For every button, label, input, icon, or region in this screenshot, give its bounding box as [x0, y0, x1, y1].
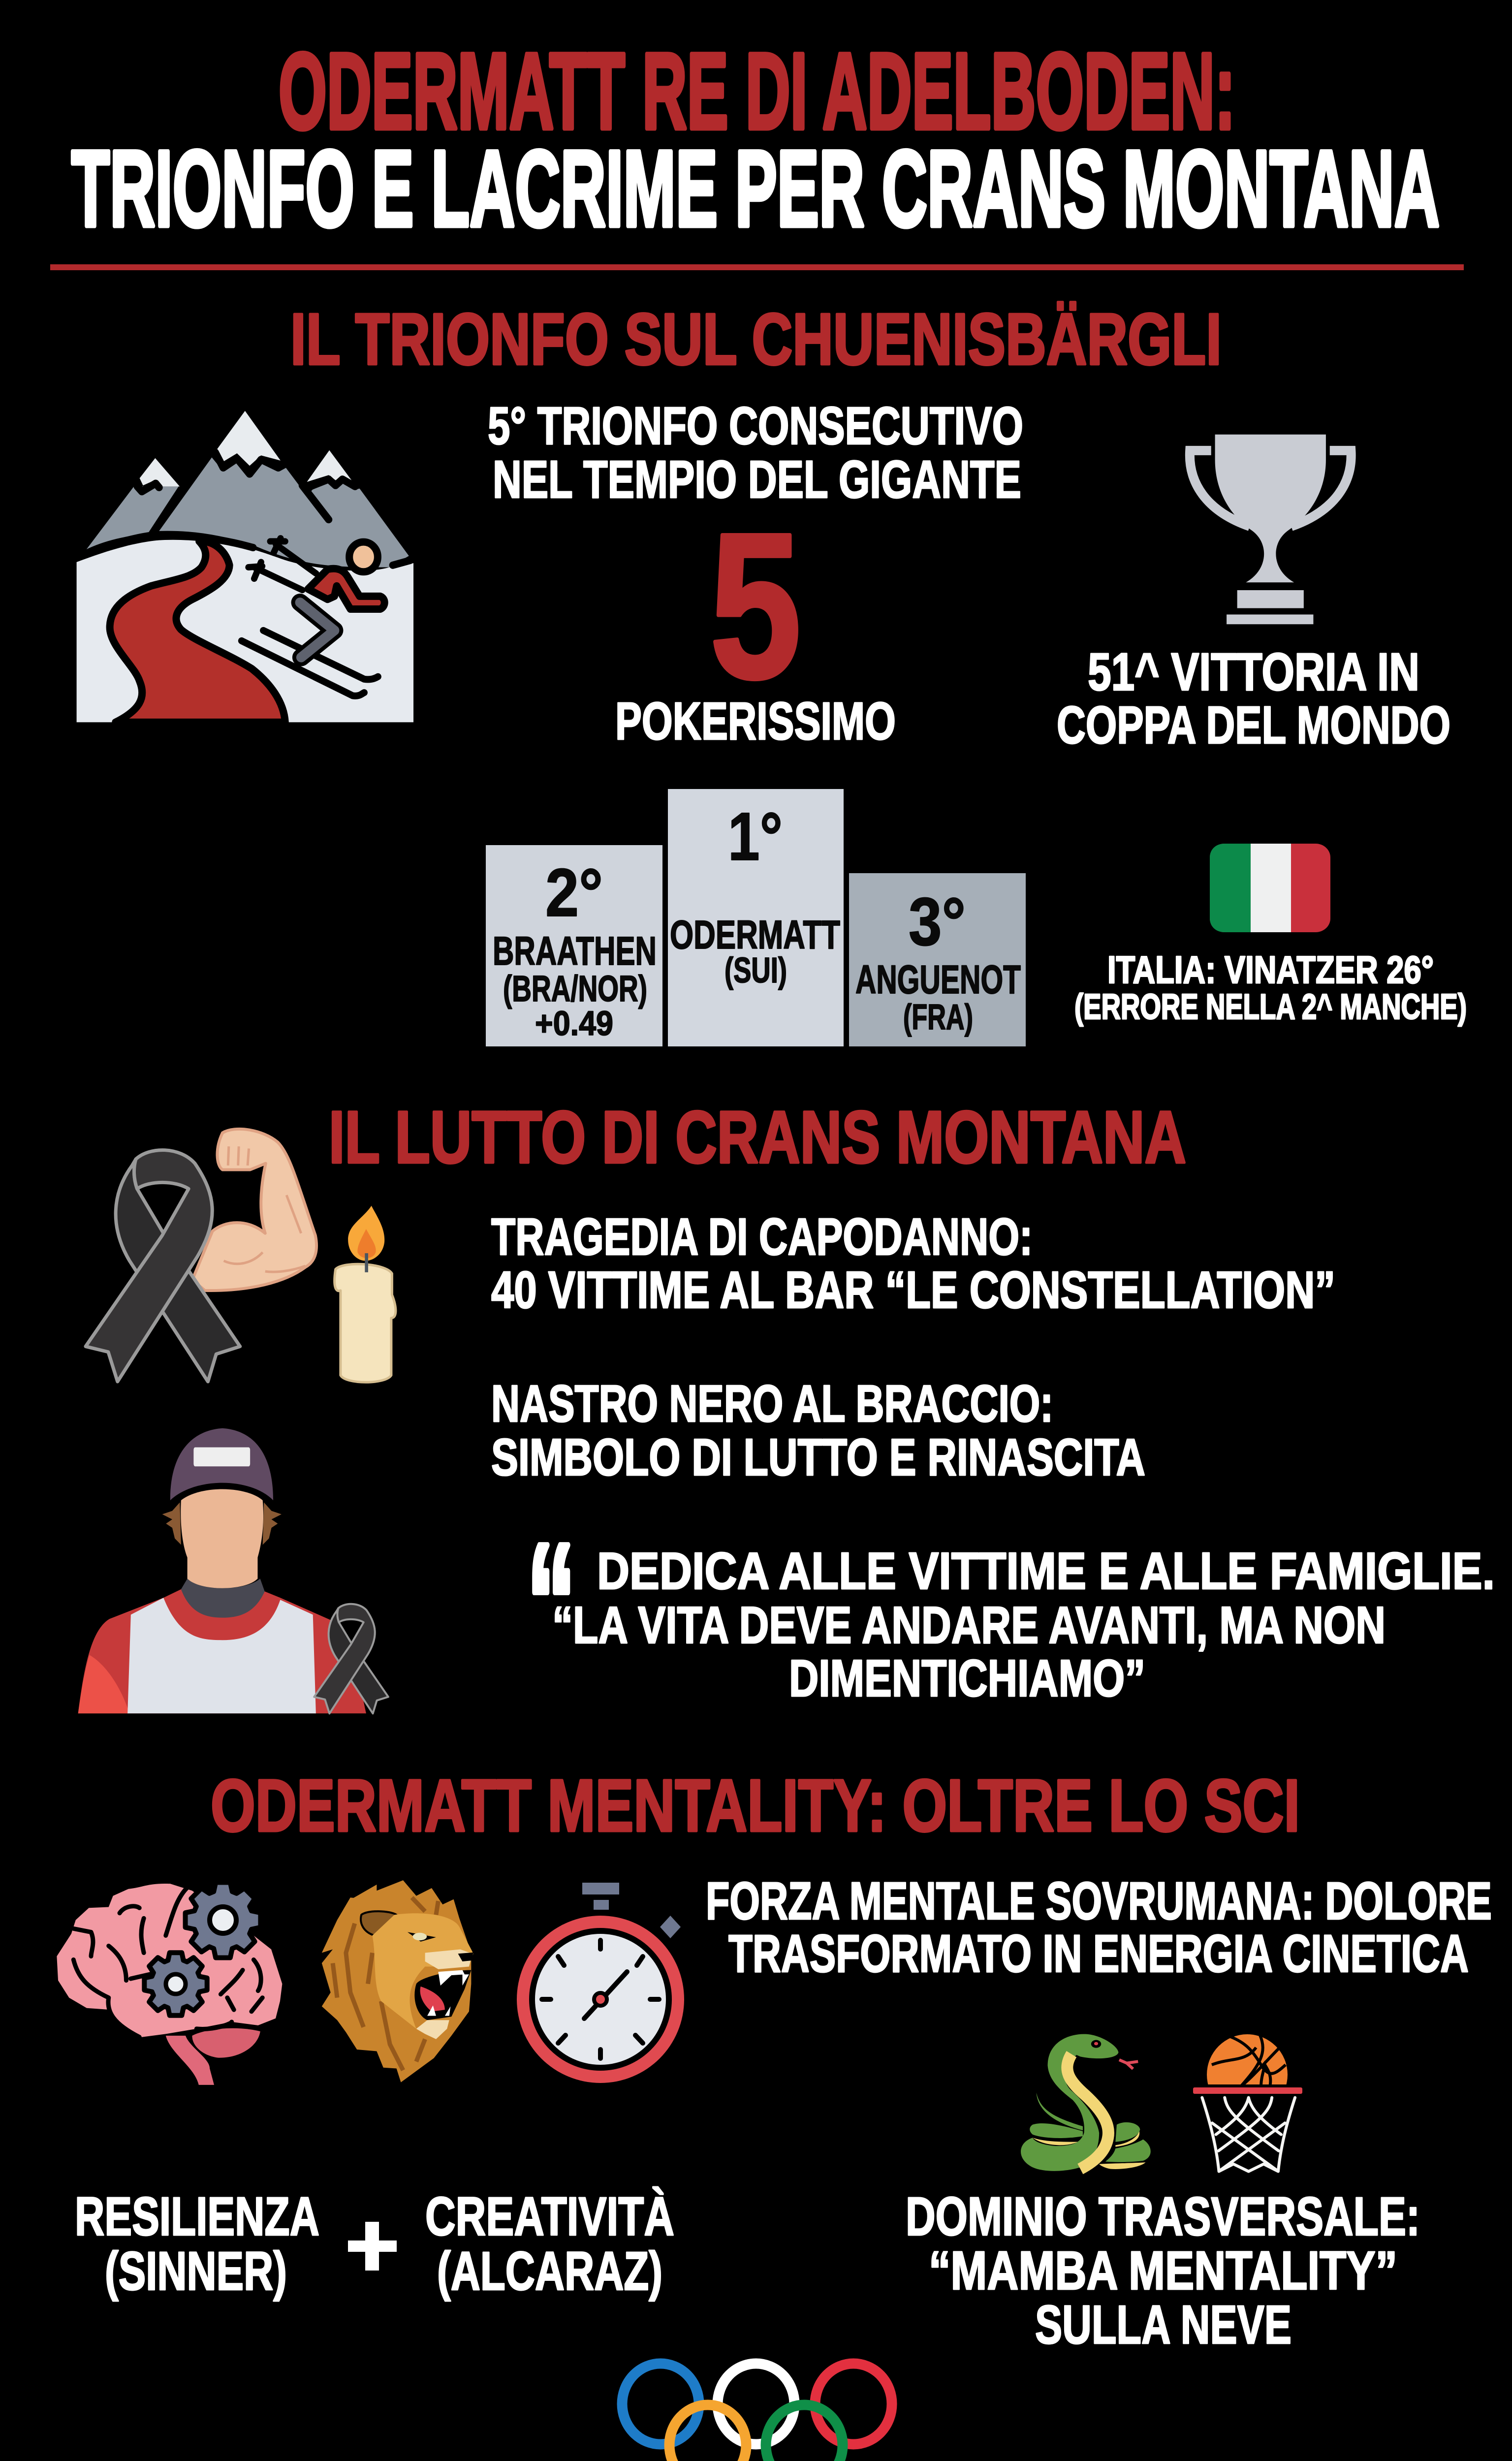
- text: tragedy: TRAGEDIA DI CAPODANNO:: [491, 1208, 1033, 1266]
- podium: third place: ANGUENOT: [855, 957, 1021, 1002]
- stat: fifth consecutive win: POKERISSIMO: [615, 691, 896, 751]
- text: black ribbon: [491, 1375, 1145, 1486]
- podium: first place: 1°: [728, 799, 783, 875]
- quote: “: [527, 1509, 576, 1696]
- icon: black ribbon: [86, 1150, 240, 1382]
- icon: basketball hoop: [1193, 2034, 1302, 2172]
- quote: [527, 1509, 1495, 1707]
- icon: plus: [348, 2222, 397, 2271]
- icon: flexed arm: [192, 1129, 316, 1291]
- stat: 51st victory: 51^ VITTORIA IN: [1088, 642, 1419, 701]
- podium: second place: (BRA/NOR): [503, 968, 647, 1009]
- text: black ribbon: NASTRO NERO AL BRACCIO:: [491, 1375, 1053, 1433]
- icon: lion: [322, 1880, 473, 2082]
- podium: third place: 3°: [909, 884, 966, 960]
- text: creativity: (ALCARAZ): [437, 2241, 662, 2302]
- section heading: il lutto: IL LUTTO DI CRANS MONTANA: [329, 1096, 1186, 1178]
- icon: italian flag: [1210, 844, 1330, 932]
- text: black ribbon: SIMBOLO DI LUTTO E RINASCITA: [491, 1428, 1145, 1486]
- text: mental strength: [706, 1871, 1492, 1983]
- icon: olympic rings: [622, 2364, 892, 2461]
- stat: fifth consecutive win: 5° TRIONFO CONSECUTIVO: [488, 396, 1023, 455]
- stat: fifth consecutive win: [488, 396, 1023, 751]
- stat: fifth consecutive win: 5: [710, 491, 801, 722]
- podium: third place: (FRA): [903, 998, 973, 1037]
- text: resilience: (SINNER): [105, 2241, 287, 2302]
- icon: stopwatch: [517, 1883, 684, 2083]
- podium: third place: [849, 873, 1026, 1046]
- icon: skier on mountain: [77, 411, 413, 722]
- podium: second place: BRAATHEN: [493, 929, 657, 974]
- podium: second place: [486, 845, 662, 1046]
- text: tragedy: [491, 1208, 1335, 1319]
- icon: brain with gears: [57, 1883, 282, 2085]
- italy note: [1074, 948, 1467, 1027]
- stat: 51st victory: [1057, 642, 1450, 755]
- icon: trophy: [1190, 435, 1351, 624]
- text: transversal domination: [906, 2186, 1420, 2355]
- icon: athlete with ribbon: [78, 1428, 388, 1713]
- italy note: ITALIA: VINATZER 26°: [1107, 948, 1434, 991]
- podium: first place: [668, 789, 844, 1046]
- podium: first place: ODERMATT: [670, 913, 840, 957]
- podium: first place: (SUI): [724, 951, 787, 990]
- podium: second place: +0.49: [535, 1004, 613, 1042]
- section heading: il trionfo: IL TRIONFO SUL CHUENISBÄRGLI: [290, 299, 1222, 380]
- text: resilience: RESILIENZA: [75, 2186, 319, 2247]
- icon: candle: [335, 1206, 396, 1382]
- text: transversal domination: SULLA NEVE: [1035, 2295, 1292, 2355]
- icon: snake: [1021, 2034, 1151, 2171]
- podium: [486, 789, 1026, 1046]
- text: transversal domination: “MAMBA MENTALITY”: [929, 2240, 1397, 2301]
- text: creativity: [425, 2186, 674, 2302]
- quote: DIMENTICHIAMO”: [789, 1649, 1145, 1707]
- text: resilience: [75, 2186, 319, 2302]
- stat: fifth consecutive win: NEL TEMPIO DEL GIGANTE: [493, 449, 1021, 509]
- podium: second place: 2°: [545, 855, 603, 931]
- title: [71, 31, 1440, 249]
- text: creativity: CREATIVITÀ: [425, 2186, 674, 2247]
